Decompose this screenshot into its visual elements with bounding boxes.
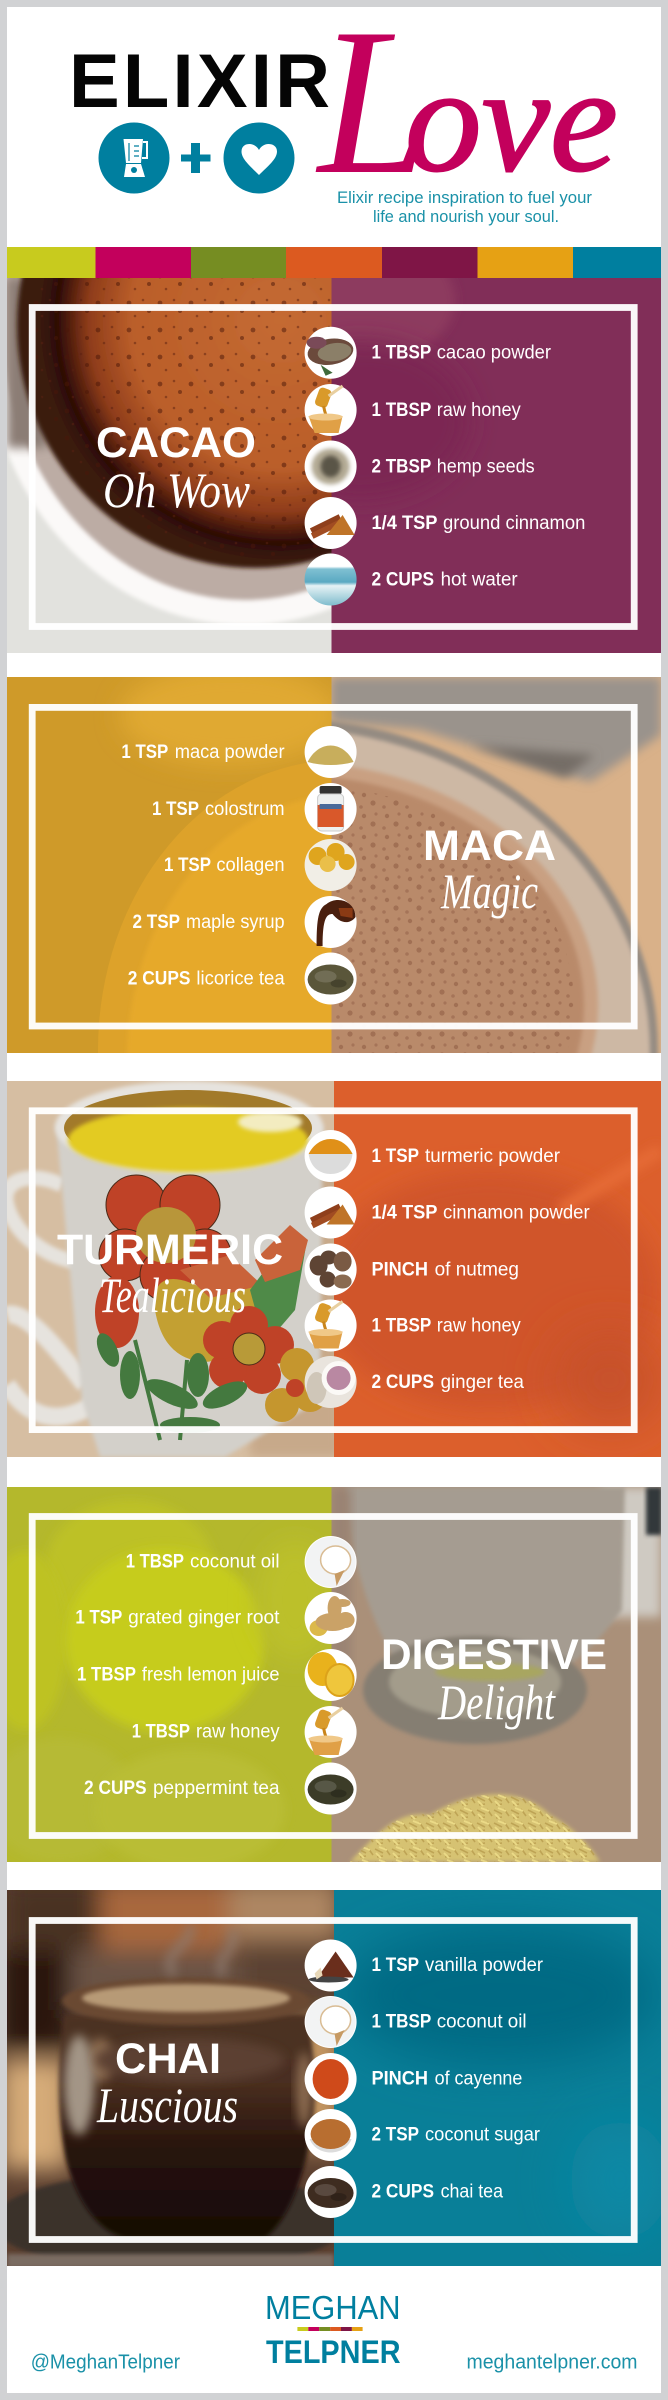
ingredient: ground cinnamon: 1/4 TSP xyxy=(372,513,438,534)
icon: coconut oil xyxy=(305,1996,357,2048)
ingredient: nutmeg xyxy=(372,1260,519,1280)
icon: heart xyxy=(224,122,294,194)
icon: ginger root xyxy=(305,1592,357,1644)
ingredient: maple syrup: maple syrup xyxy=(186,912,285,933)
ingredient: maple syrup: 2 TSP xyxy=(132,912,180,933)
ingredient: colostrum: colostrum xyxy=(205,799,285,820)
ingredient: coconut oil: 1 TBSP xyxy=(126,1552,184,1572)
ingredient: colostrum xyxy=(152,799,285,820)
ingredient: ground cinnamon xyxy=(372,513,585,534)
panel: cacao xyxy=(7,278,661,653)
ingredient: raw honey xyxy=(132,1722,280,1742)
ingredient: vanilla powder: vanilla powder xyxy=(425,1955,544,1976)
ingredient: peppermint tea: 2 CUPS xyxy=(84,1778,147,1799)
ingredient: chai tea xyxy=(372,2182,503,2202)
ingredient: cinnamon powder xyxy=(372,1202,590,1224)
ingredient: hot water xyxy=(372,570,518,590)
icon: plus xyxy=(181,143,210,173)
panel: digestive xyxy=(0,1487,662,1870)
icon: licorice tea xyxy=(305,952,357,1004)
photo: floral mug with golden milk xyxy=(6,1081,340,1457)
ingredient: maca powder xyxy=(121,742,285,763)
icon: hemp seeds xyxy=(305,440,357,492)
panel: chai xyxy=(0,1880,668,2272)
ingredient: cacao powder xyxy=(372,343,552,364)
icon: honey xyxy=(305,1300,357,1352)
panel: maca xyxy=(7,677,661,1053)
ingredient: collagen: 1 TSP xyxy=(164,855,211,876)
icon: ginger tea xyxy=(305,1356,357,1408)
icon: cayenne xyxy=(305,2053,357,2105)
photo: digestive mug on board with grated ginger xyxy=(331,1487,662,1862)
subtitle: life and nourish your soul. xyxy=(373,207,559,226)
logo: Meghan Telpner: TELPNER xyxy=(266,2334,400,2370)
icon: nutmeg xyxy=(305,1244,357,1296)
heading: DIGESTIVE: DIGESTIVE xyxy=(381,1631,607,1679)
ingredient: coconut oil: coconut oil xyxy=(190,1552,280,1572)
ingredient: hot water: 2 CUPS xyxy=(372,570,434,590)
icon: coconut oil xyxy=(305,1536,357,1588)
ingredient: ginger tea: 2 CUPS xyxy=(372,1372,434,1393)
icon: peppermint tea xyxy=(305,1762,357,1814)
photo: maca latte in glass xyxy=(332,677,661,1053)
ingredient: vanilla powder xyxy=(372,1955,544,1976)
ingredient: coconut oil: 1 TBSP xyxy=(372,2012,431,2032)
script: Magic: Magic xyxy=(440,863,538,919)
heading: CHAI: CHAI xyxy=(115,2035,221,2083)
ingredient: hemp seeds: 2 TBSP xyxy=(372,456,431,478)
ingredient: raw honey: 1 TBSP xyxy=(372,400,431,421)
ingredient: licorice tea xyxy=(128,968,285,990)
photo: steaming clay cup xyxy=(0,1880,348,2272)
ingredient: chai tea: 2 CUPS xyxy=(372,2182,434,2202)
white frame xyxy=(32,1111,634,1430)
white frame xyxy=(32,308,634,626)
ingredient: cayenne: PINCH xyxy=(372,2068,428,2090)
social handle: @MeghanTelpner xyxy=(31,2352,180,2374)
script: Delight: Delight xyxy=(437,1674,556,1730)
ingredient: turmeric powder: 1 TSP xyxy=(372,1146,419,1167)
ingredient: cinnamon powder: cinnamon powder xyxy=(443,1202,590,1224)
header xyxy=(69,0,618,226)
title: ELIXIR: ELIXIR xyxy=(69,39,330,124)
ingredient: ground cinnamon: ground cinnamon xyxy=(443,513,585,534)
ingredient: maca powder: maca powder xyxy=(175,742,285,763)
photo: cacao drink in cup xyxy=(7,278,332,653)
heading: MACA: MACA xyxy=(423,822,556,870)
ingredient: hot water: hot water xyxy=(441,570,518,590)
photo tint: teal xyxy=(334,1890,668,2266)
panel: turmeric xyxy=(6,1081,665,1457)
ingredient: raw honey: raw honey xyxy=(437,1316,521,1336)
ingredient: coconut oil xyxy=(372,2012,527,2032)
ingredient: grated ginger root: 1 TSP xyxy=(75,1608,123,1628)
ingredient: turmeric powder: turmeric powder xyxy=(425,1146,561,1167)
ingredient: cacao powder: cacao powder xyxy=(437,343,552,364)
ingredient: maca powder: 1 TSP xyxy=(121,742,169,763)
ingredient: ginger tea: ginger tea xyxy=(441,1372,524,1393)
icon: honey xyxy=(305,384,357,436)
icon: cinnamon xyxy=(305,1186,357,1238)
ingredient: coconut oil xyxy=(126,1552,280,1572)
ingredient: fresh lemon juice xyxy=(77,1664,280,1686)
script: Luscious: Luscious xyxy=(96,2077,238,2133)
heading: CACAO: CACAO xyxy=(96,419,256,467)
photo tint: amber xyxy=(7,677,332,1053)
ingredient: collagen: collagen xyxy=(216,855,285,876)
icon: lemons xyxy=(305,1649,357,1701)
ingredient: raw honey: 1 TBSP xyxy=(132,1722,190,1742)
title: Love script: ove xyxy=(405,37,618,203)
logo: Meghan Telpner xyxy=(265,2289,400,2370)
ingredient: vanilla powder: 1 TSP xyxy=(372,1955,419,1976)
ingredient: raw honey xyxy=(372,1316,521,1336)
icon: chai tea xyxy=(305,2166,357,2218)
footer xyxy=(31,2289,637,2374)
ingredient: coconut sugar xyxy=(372,2124,541,2146)
ingredient: raw honey: raw honey xyxy=(437,400,521,421)
ingredient: peppermint tea xyxy=(84,1778,280,1799)
ingredient: nutmeg: of nutmeg xyxy=(435,1260,519,1280)
icon: collagen capsules xyxy=(305,839,357,891)
subtitle: Elixir recipe inspiration to fuel your xyxy=(337,188,592,207)
icon: coconut sugar xyxy=(305,2109,357,2161)
ingredient: fresh lemon juice: 1 TBSP xyxy=(77,1664,136,1686)
icon: cinnamon xyxy=(305,497,357,549)
ingredient: nutmeg: PINCH xyxy=(372,1260,428,1280)
ingredient: raw honey xyxy=(372,400,521,421)
icon: colostrum bottle xyxy=(305,783,357,835)
icon: vanilla powder xyxy=(305,1940,357,1992)
photo tint: lime lemons and ginger xyxy=(0,1487,335,1870)
ingredient: licorice tea: licorice tea xyxy=(196,968,285,990)
ingredient: cinnamon powder: 1/4 TSP xyxy=(372,1202,438,1224)
icon: turmeric bowl xyxy=(305,1130,357,1182)
ingredient: coconut sugar: coconut sugar xyxy=(425,2124,541,2146)
script: Oh Wow: Oh Wow xyxy=(103,462,250,518)
ingredient: collagen xyxy=(164,855,285,876)
ingredient: ginger tea xyxy=(372,1372,524,1393)
ingredient: licorice tea: 2 CUPS xyxy=(128,968,190,990)
ingredient: raw honey: 1 TBSP xyxy=(372,1316,431,1336)
ingredient: coconut oil: coconut oil xyxy=(437,2012,527,2032)
white frame xyxy=(32,707,634,1026)
script: Tealicious: Tealicious xyxy=(99,1267,246,1323)
icon: water xyxy=(305,554,357,606)
icon: honey xyxy=(305,1706,357,1758)
icon: blender xyxy=(98,122,170,194)
website: meghantelpner.com xyxy=(466,2352,638,2374)
ingredient: cayenne xyxy=(372,2068,522,2090)
icon: cacao pod xyxy=(305,327,357,379)
colour stripe xyxy=(7,247,661,278)
ingredient: raw honey: raw honey xyxy=(196,1722,280,1742)
white frame xyxy=(32,1516,634,1836)
photo tint: orange xyxy=(320,1081,665,1457)
ingredient: grated ginger root: grated ginger root xyxy=(128,1608,280,1628)
ingredient: hemp seeds: hemp seeds xyxy=(437,456,535,478)
ingredient: cayenne: of cayenne xyxy=(435,2068,522,2090)
logo: Meghan Telpner: MEGHAN xyxy=(265,2289,400,2326)
ingredient: chai tea: chai tea xyxy=(441,2182,503,2202)
ingredient: hemp seeds xyxy=(372,456,535,478)
subtitle xyxy=(337,188,592,226)
icon: maple syrup xyxy=(305,896,357,948)
ingredient: coconut sugar: 2 TSP xyxy=(372,2124,419,2146)
white frame xyxy=(32,1920,634,2240)
heading: TURMERIC: TURMERIC xyxy=(57,1226,283,1274)
photo tint: plum xyxy=(332,278,661,653)
ingredient: maple syrup xyxy=(132,912,285,933)
ingredient: cacao powder: 1 TBSP xyxy=(372,343,431,364)
ingredient: fresh lemon juice: fresh lemon juice xyxy=(142,1664,280,1686)
title: Love script xyxy=(315,0,618,218)
ingredient: peppermint tea: peppermint tea xyxy=(153,1778,280,1799)
icon: maca powder xyxy=(305,726,357,778)
ingredient: colostrum: 1 TSP xyxy=(152,799,199,820)
